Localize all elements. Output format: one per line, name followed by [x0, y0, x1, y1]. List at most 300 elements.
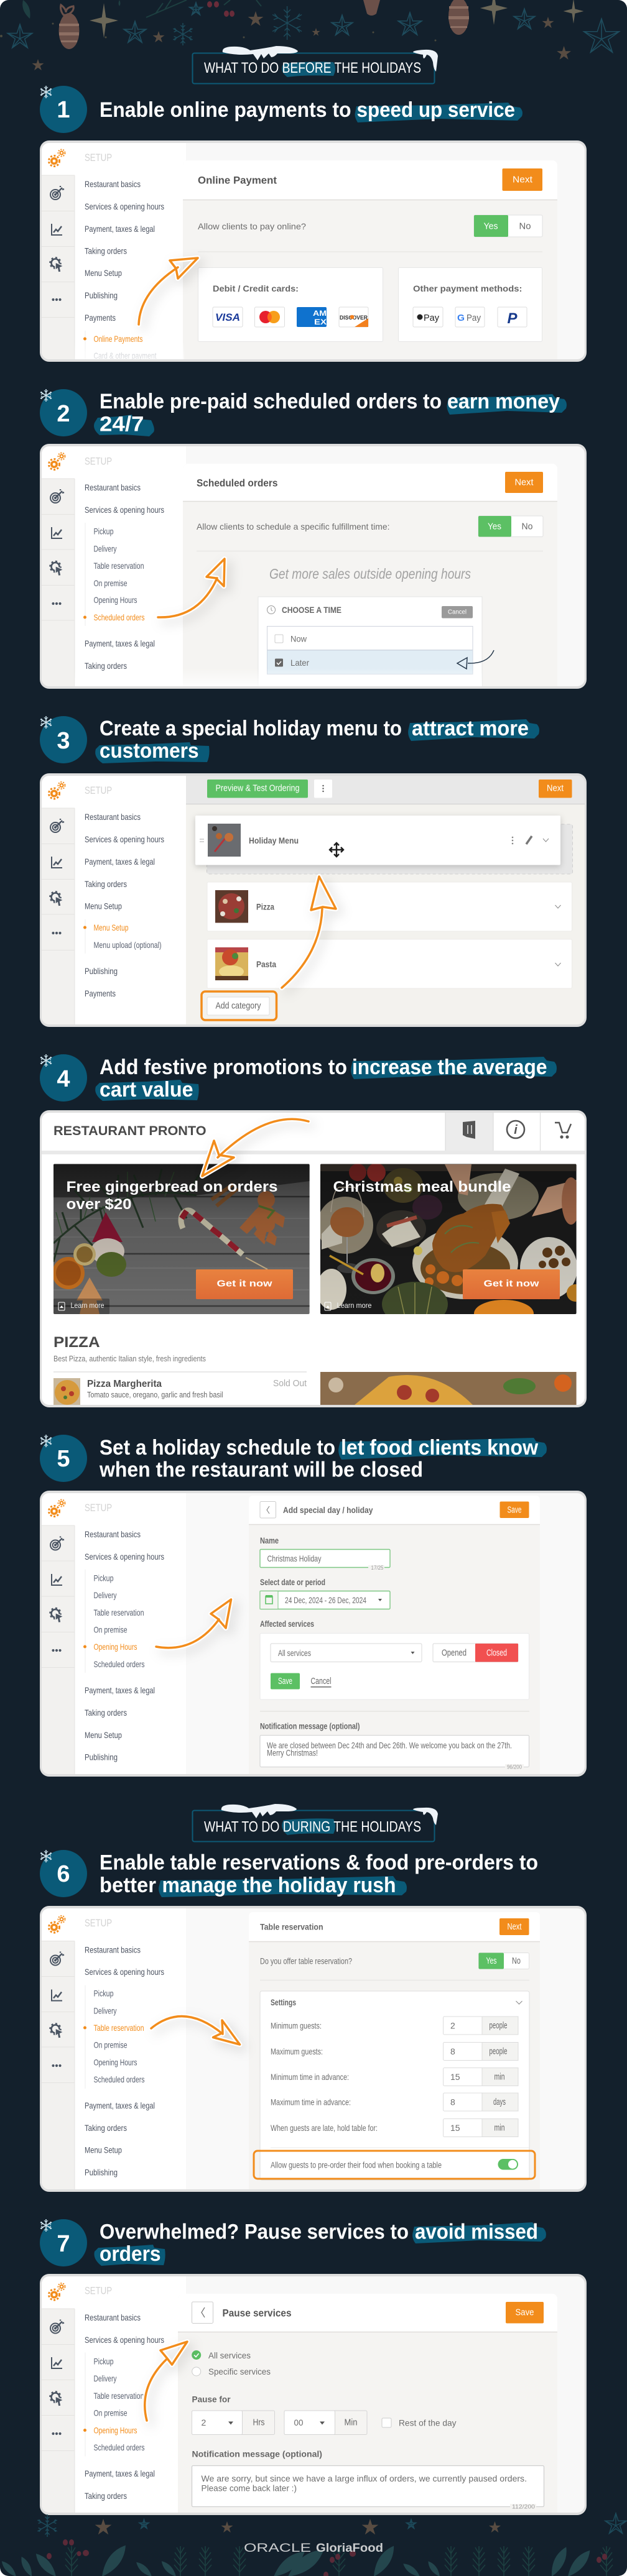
badge 4	[40, 1054, 87, 1102]
holiday menu category: Holiday Menu	[249, 835, 299, 845]
sidebar menu: Menu Setup	[85, 901, 122, 911]
arrow	[158, 559, 225, 617]
tag text: WHAT TO DO DURING THE HOLIDAYS	[204, 1819, 421, 1835]
sidebar menu: Services & opening hours	[85, 2335, 164, 2345]
setting row: maximum guests	[271, 2043, 518, 2060]
panel: pause services screenshot	[40, 2274, 587, 2524]
brand logo	[244, 2542, 383, 2555]
affected services card	[260, 1634, 529, 1700]
time chooser card: Now	[290, 634, 307, 644]
step 5 heading: when the restaurant will be closed	[99, 1458, 423, 1482]
panel: restaurant promotions screenshot: over $20	[66, 1196, 132, 1213]
service options: All services	[208, 2350, 251, 2360]
bottom festive decoration	[0, 2513, 626, 2576]
panel: holiday menu screenshot	[40, 773, 587, 1027]
setting row: hold table: When guests are late, hold table for:	[271, 2123, 378, 2133]
top festive decoration	[0, 0, 620, 70]
add category button: Add category	[215, 1001, 261, 1011]
restaurant name: RESTAURANT PRONTO	[53, 1124, 207, 1138]
pause duration selects: 00	[294, 2417, 304, 2427]
sidebar icons	[49, 149, 65, 301]
arrow	[282, 876, 336, 988]
main card: Save	[278, 1676, 292, 1686]
pizza category	[207, 882, 572, 931]
sidebar menu: SETUP	[85, 455, 112, 467]
sidebar menu: Services & opening hours	[85, 505, 164, 515]
section tag: before the holidays	[193, 46, 438, 83]
main card: Pay	[424, 313, 439, 323]
get it now button 1	[196, 1269, 293, 1299]
settings box: Allow guests to pre-order their food when booking a table	[271, 2160, 442, 2169]
service options	[192, 2350, 271, 2376]
pizza photo	[320, 1372, 577, 1405]
time chooser card	[258, 597, 494, 690]
main card: VISA	[215, 311, 240, 323]
setting row: maximum time: 8	[450, 2097, 455, 2107]
sidebar menu: Restaurant basics	[85, 179, 141, 189]
sidebar menu: Payments	[85, 313, 116, 323]
sidebar menu: Menu upload (optional)	[93, 940, 162, 950]
sidebar menu: Table reservation	[93, 1608, 144, 1617]
sidebar menu	[83, 1917, 164, 2177]
sidebar menu: Publishing	[85, 290, 118, 300]
small hand-drawn arrow	[457, 650, 494, 669]
sidebar menu: SETUP	[85, 152, 112, 163]
step 4 heading	[40, 1054, 557, 1102]
step 4 heading: Add festive promotions to	[100, 1056, 347, 1079]
sidebar menu: Restaurant basics	[85, 2312, 141, 2322]
main card: Cancel	[311, 1676, 331, 1686]
sidebar menu: Table reservation	[93, 2023, 144, 2033]
sidebar menu: Taking orders	[85, 2123, 127, 2133]
setting row: maximum guests: people	[489, 2046, 508, 2056]
panel: scheduled orders screenshot	[40, 444, 587, 692]
yes no toggle	[478, 516, 543, 537]
sidebar menu: Menu Setup	[85, 2145, 122, 2155]
sidebar menu: On premise	[93, 1625, 128, 1635]
save button	[506, 2302, 544, 2324]
toggle switch	[498, 2159, 518, 2169]
snow cap	[221, 1804, 438, 1825]
main card: P	[507, 310, 518, 327]
sidebar menu	[83, 2285, 164, 2501]
gingerbread man	[239, 1191, 285, 1246]
time chooser card: Cancel	[448, 609, 467, 615]
main card: Closed	[486, 1647, 507, 1658]
setting row: hold table	[271, 2118, 518, 2137]
turkey plate	[412, 1227, 518, 1299]
sidebar menu: Services & opening hours	[85, 1967, 164, 1977]
main card: Pay	[467, 313, 481, 323]
promo text 1: Free gingerbread on orders	[66, 1179, 277, 1195]
highlight strokes	[408, 719, 539, 741]
step 7 heading: Overwhelmed? Pause services to	[100, 2220, 409, 2244]
orange highlight box	[254, 2151, 535, 2179]
promo text 2: Christmas meal bundle	[333, 1179, 511, 1195]
top action bar: Preview & Test Ordering	[215, 783, 300, 793]
sidebar menu: Taking orders	[85, 246, 127, 256]
brand logo: GloriaFood	[316, 2542, 383, 2555]
sidebar menu: Taking orders	[85, 879, 127, 889]
learn more 2	[325, 1302, 331, 1310]
step 5 heading: Set a holiday schedule to	[100, 1436, 335, 1460]
main card: Affected services	[260, 1619, 314, 1629]
step 3 heading: customers	[100, 739, 199, 763]
setting row: maximum time: days	[493, 2097, 506, 2107]
sidebar menu: Payment, taxes & legal	[85, 857, 155, 867]
step 3 heading: attract more	[412, 717, 529, 740]
setting row: maximum guests: Maximum guests:	[271, 2046, 323, 2056]
sidebar menu: Restaurant basics	[85, 1529, 141, 1539]
setting row: maximum time	[271, 2093, 518, 2111]
sidebar menu: Delivery	[93, 2005, 117, 2015]
pizza section: Best Pizza, authentic Italian style, fresh ingredients	[53, 1354, 206, 1363]
pizza section: PIZZA	[53, 1334, 100, 1351]
main card: G	[457, 313, 465, 323]
main card	[249, 1912, 540, 2198]
sidebar icons	[49, 1916, 65, 2067]
badge 6	[40, 1850, 87, 1897]
setting row: minimum time: Minimum time in advance:	[271, 2072, 349, 2082]
main card: Select date or period	[260, 1577, 325, 1587]
pizza section: Sold Out	[273, 1378, 307, 1389]
badge 1	[40, 86, 87, 133]
main card: EX	[314, 318, 327, 326]
main card: Scheduled orders	[197, 477, 277, 489]
main card: Next	[513, 174, 533, 185]
sidebar menu: Publishing	[85, 966, 118, 976]
pizza section	[53, 1334, 307, 1405]
sidebar menu: Services & opening hours	[85, 201, 164, 211]
sidebar menu: Pickup	[93, 526, 114, 536]
highlight strokes	[447, 394, 567, 415]
notification textarea	[260, 1736, 529, 1767]
arrow	[151, 2017, 240, 2045]
sidebar menu: SETUP	[85, 784, 112, 796]
main card: Please come back later :)	[202, 2483, 297, 2493]
main card	[183, 160, 557, 366]
setting row: maximum guests: 8	[450, 2046, 455, 2056]
main card: We are closed between Dec 24th and Dec 26th. We welcome you back on the 27th.	[267, 1741, 512, 1750]
pause duration selects: Rest of the day	[399, 2418, 457, 2428]
sidebar menu: Online Payments	[93, 334, 143, 344]
step 4 heading: increase the average	[352, 1056, 547, 1079]
step 3 heading: 3	[57, 728, 70, 754]
sidebar menu: Payment, taxes & legal	[85, 638, 155, 648]
step 4 heading: cart value	[100, 1078, 193, 1102]
step 7 heading: 7	[57, 2231, 70, 2257]
step 6 heading: Enable table reservations & food pre-orders to	[100, 1851, 538, 1875]
sidebar menu: Opening Hours	[93, 2426, 137, 2436]
sidebar menu	[83, 455, 164, 671]
main card: Next	[508, 1921, 522, 1932]
badge 7	[40, 2219, 87, 2266]
step 5 heading	[40, 1435, 547, 1482]
main card: No	[512, 1956, 521, 1966]
step 2 heading: earn money	[447, 390, 560, 413]
arrow	[139, 258, 198, 324]
main card: We are sorry, but since we have a large influx of orders, we currently paused orders.	[202, 2473, 527, 2483]
sidebar menu: Restaurant basics	[85, 1944, 141, 1954]
step 6 heading	[40, 1850, 538, 1897]
sidebar menu: Opening Hours	[93, 595, 137, 605]
setting row: minimum guests	[271, 2017, 518, 2035]
setting row: minimum guests: 2	[450, 2020, 455, 2030]
step 5 heading: 5	[57, 1446, 70, 1472]
sidebar menu: Payment, taxes & legal	[85, 2468, 155, 2478]
move cursor	[330, 843, 343, 857]
add category button	[202, 991, 276, 1020]
main card: 24 Dec, 2024 - 26 Dec, 2024	[285, 1595, 366, 1605]
top action bar	[207, 780, 572, 798]
sidebar menu: Table reservation	[93, 561, 144, 571]
sidebar menu: Menu Setup	[93, 922, 129, 932]
main card: Opened	[442, 1647, 467, 1658]
snow cap	[223, 46, 438, 71]
sidebar menu: Menu Setup	[85, 268, 122, 278]
badge 5	[40, 1435, 87, 1482]
sidebar menu: Payment, taxes & legal	[85, 2100, 155, 2110]
highlight stroke	[338, 1438, 547, 1460]
main card: Allow clients to pay online?	[198, 221, 306, 231]
main card: 112/200	[512, 2504, 535, 2510]
main card: Table reservation	[260, 1922, 323, 1932]
pasta category: Pasta	[256, 959, 276, 969]
sidebar menu: SETUP	[85, 1917, 112, 1929]
step 4 heading: 4	[57, 1066, 70, 1092]
sidebar menu: Menu Setup	[85, 1730, 122, 1740]
pizza section: Tomato sauce, oregano, garlic and fresh basil	[87, 1390, 223, 1399]
main card: Pause services	[223, 2307, 291, 2319]
setting row: minimum time: 15	[450, 2072, 460, 2082]
sidebar menu: Pickup	[93, 2356, 114, 2366]
step 5 heading: let food clients know	[341, 1436, 539, 1460]
nav icons	[463, 1121, 571, 1139]
step 6 heading: 6	[57, 1861, 70, 1887]
main card: DISCOVER	[340, 315, 368, 321]
panel: restaurant promotions screenshot: Learn more	[337, 1301, 372, 1310]
learn more 1	[53, 1299, 109, 1314]
main card: Save	[515, 2307, 534, 2317]
setting row: minimum guests: people	[489, 2020, 508, 2031]
pause duration selects	[192, 2411, 457, 2434]
main card: Yes	[484, 221, 498, 231]
step 2 heading: 2	[57, 401, 70, 427]
sidebar menu: Taking orders	[85, 1708, 127, 1718]
time chooser card: Later	[290, 658, 309, 668]
main card: Notification message (optional)	[192, 2449, 322, 2459]
step 2 heading: Enable pre-paid scheduled orders to	[100, 390, 442, 413]
panel: table reservation screenshot	[40, 1906, 587, 2198]
panel: restaurant promotions screenshot	[40, 1110, 587, 1407]
highlight strokes	[412, 2222, 546, 2243]
panel: restaurant promotions screenshot: Get it now	[216, 1278, 272, 1289]
sidebar menu: Delivery	[93, 543, 117, 553]
sidebar menu: Pickup	[93, 1988, 114, 1998]
sidebar menu: Taking orders	[85, 2491, 127, 2501]
fir branch	[53, 1169, 199, 1262]
sidebar menu: Scheduled orders	[93, 612, 144, 622]
sidebar menu: Payments	[85, 988, 116, 998]
jam bowl	[351, 1258, 395, 1294]
sidebar menu: Card & other payment	[93, 351, 157, 361]
step 1 heading	[40, 86, 522, 133]
sidebar menu: On premise	[93, 2040, 128, 2050]
main card: Yes	[488, 521, 501, 532]
arrow	[202, 1119, 309, 1176]
promo: christmas meal	[317, 1163, 584, 1327]
settings box	[254, 1991, 535, 2180]
main card: All services	[278, 1648, 311, 1658]
highlight strokes	[351, 1057, 557, 1079]
sidebar icons	[49, 782, 65, 934]
sidebar menu	[83, 1502, 164, 1762]
save button	[500, 1502, 529, 1518]
sidebar menu	[83, 784, 164, 998]
step 2 heading: 24/7	[100, 413, 144, 436]
sidebar menu: Scheduled orders	[93, 1659, 144, 1669]
highlight: before	[282, 62, 335, 77]
next button	[503, 168, 542, 191]
top action bar: Next	[547, 783, 564, 793]
main card	[178, 2294, 557, 2524]
sidebar icons	[49, 1499, 65, 1652]
brand logo: ORACLE	[244, 2542, 311, 2555]
candy cane	[181, 1210, 243, 1254]
arrow	[145, 2342, 187, 2421]
sidebar menu: On premise	[93, 2408, 128, 2418]
sidebar menu: Services & opening hours	[85, 1552, 164, 1562]
get it now button 2	[463, 1269, 560, 1299]
pause duration selects: Min	[345, 2417, 357, 2428]
main card: No	[519, 221, 531, 231]
nav icons: i	[514, 1123, 518, 1137]
step 2 heading	[40, 389, 567, 436]
pause duration selects: 2	[202, 2417, 207, 2427]
sidebar menu: Scheduled orders	[93, 2074, 144, 2084]
main card: 17/25	[371, 1565, 383, 1571]
sidebar menu: SETUP	[85, 2285, 112, 2296]
pumpkins and dishes	[317, 1269, 346, 1310]
sidebar menu: Publishing	[85, 1752, 118, 1762]
badge 2	[40, 389, 87, 436]
sidebar menu: Publishing	[85, 2167, 118, 2177]
main card: Add special day / holiday	[283, 1505, 373, 1515]
card: other methods	[398, 267, 542, 342]
section tag: during the holidays	[193, 1804, 438, 1841]
next button	[499, 1918, 529, 1935]
sidebar icons	[49, 453, 65, 605]
cinnamon	[211, 1184, 238, 1206]
sidebar menu: Opening Hours	[93, 2058, 137, 2068]
gnome	[92, 1212, 123, 1242]
sidebar menu: Restaurant basics	[85, 812, 141, 822]
table items	[458, 1173, 539, 1220]
main card: Name	[260, 1535, 279, 1545]
setting row: minimum guests: Minimum guests:	[271, 2020, 322, 2030]
step 3 heading	[40, 716, 539, 763]
step 7 heading: orders	[100, 2242, 160, 2266]
citrus slices	[52, 1257, 85, 1289]
sidebar icons	[49, 2283, 65, 2435]
sidebar menu: Payment, taxes & legal	[85, 1685, 155, 1695]
main card: Christmas Holiday	[267, 1553, 321, 1563]
step 6 heading: manage the holiday rush	[162, 1874, 396, 1897]
main card	[249, 1496, 540, 1782]
sidebar menu: On premise	[93, 578, 128, 588]
tag text: WHAT TO DO BEFORE THE HOLIDAYS	[204, 60, 421, 76]
main card: Do you offer table reservation?	[260, 1956, 352, 1966]
main card: 96/200	[507, 1764, 522, 1770]
time chooser card: CHOOSE A TIME	[282, 605, 341, 615]
highlight stroke	[355, 103, 522, 122]
main card: No	[521, 521, 532, 532]
card: debit credit	[198, 267, 383, 342]
step 1 heading: speed up service	[357, 98, 515, 122]
main card: Pause for	[192, 2394, 231, 2404]
setting row: hold table: 15	[450, 2123, 460, 2133]
next button	[505, 472, 543, 493]
main card: Online Payment	[198, 174, 277, 186]
notification textarea	[192, 2465, 544, 2506]
step 6 heading: better	[100, 1874, 156, 1897]
main card	[183, 464, 557, 692]
main card: AM	[313, 309, 327, 318]
step 1 heading: 1	[57, 97, 70, 123]
sidebar menu: Scheduled orders	[93, 2442, 144, 2452]
main card: Debit / Credit cards:	[213, 283, 299, 293]
sidebar menu: Delivery	[93, 1590, 117, 1600]
gingerbread tree	[77, 1277, 103, 1314]
pizza section: Pizza Margherita	[87, 1379, 162, 1389]
setting row: maximum time: Maximum time in advance:	[271, 2097, 351, 2107]
main card: Next	[515, 477, 534, 487]
sidebar menu: Pickup	[93, 1573, 114, 1583]
main card: Other payment methods:	[413, 283, 522, 293]
pizza category: Pizza	[256, 901, 274, 911]
sidebar menu: Delivery	[93, 2373, 117, 2383]
panel: restaurant promotions screenshot: Get it now	[484, 1278, 539, 1289]
badge 3	[40, 716, 87, 763]
pasta category	[207, 939, 572, 988]
setting row: minimum time	[271, 2068, 518, 2086]
holiday menu category	[195, 816, 560, 865]
promo: gingerbread	[52, 1164, 310, 1314]
yes no toggle	[479, 1953, 529, 1969]
main card: Yes	[486, 1956, 496, 1966]
sidebar menu	[83, 152, 164, 361]
highlight stroke	[159, 1876, 407, 1897]
panel: holiday schedule screenshot	[40, 1491, 587, 1782]
step 1 heading: Enable online payments to	[100, 98, 351, 122]
step 7 heading	[40, 2219, 546, 2266]
pause duration selects: Hrs	[253, 2417, 265, 2428]
yes no toggle	[474, 215, 542, 237]
sidebar menu: SETUP	[85, 1502, 112, 1514]
main card: Save	[508, 1504, 521, 1516]
step 3 heading: Create a special holiday menu to	[100, 717, 402, 740]
settings box: Settings	[271, 1997, 296, 2007]
sidebar menu: Table reservation	[93, 2391, 144, 2401]
sidebar menu: Payment, taxes & legal	[85, 224, 155, 234]
sidebar menu: Taking orders	[85, 661, 127, 671]
step 7 heading: avoid missed	[415, 2220, 538, 2244]
sidebar menu: Opening Hours	[93, 1642, 137, 1652]
setting row: minimum time: min	[494, 2071, 505, 2082]
arrow	[156, 1599, 231, 1648]
panel: online payment screenshot	[40, 140, 587, 366]
main card: Allow clients to schedule a specific fulfillment time:	[197, 522, 389, 531]
